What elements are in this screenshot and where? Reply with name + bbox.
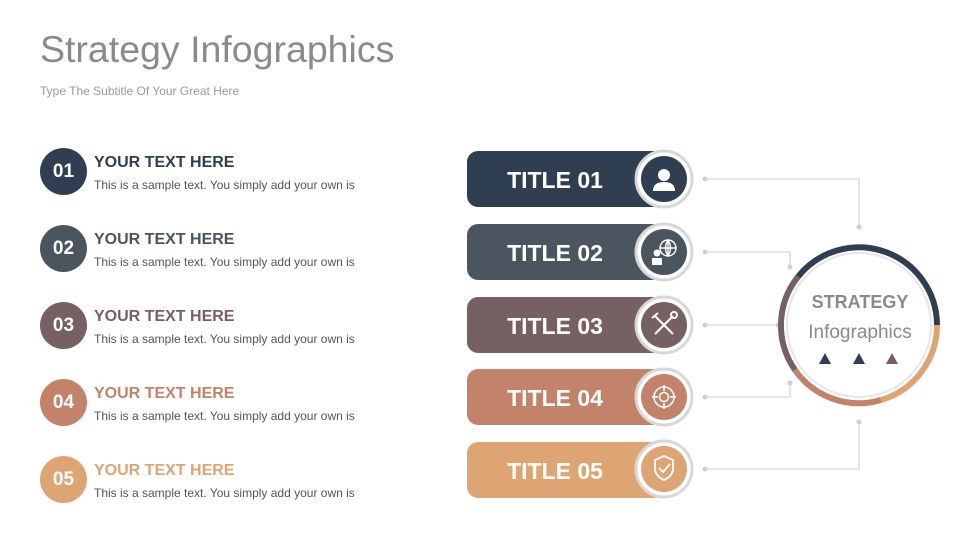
text block 05: YOUR TEXT HERE xyxy=(94,462,234,479)
bar: title 05 xyxy=(467,441,692,498)
text block 04: This is a sample text. You simply add your own is xyxy=(94,409,355,423)
text block 01 xyxy=(94,154,355,192)
number badge 04: 04 xyxy=(53,392,74,413)
central circle: STRATEGY xyxy=(812,292,908,312)
subtitle: Type The Subtitle Of Your Great Here xyxy=(40,84,239,98)
number badge 05 xyxy=(40,456,87,503)
text block 01: YOUR TEXT HERE xyxy=(94,154,234,171)
number badge 01 xyxy=(40,148,87,195)
text block 04: YOUR TEXT HERE xyxy=(94,385,234,402)
number badge 03: 03 xyxy=(53,315,74,336)
text block 03: YOUR TEXT HERE xyxy=(94,308,234,325)
number badge 02: 02 xyxy=(53,238,74,259)
number badge 03 xyxy=(40,302,87,349)
icon: tools xyxy=(652,312,677,334)
bar: title 04: TITLE 04 xyxy=(507,385,603,411)
icon: person xyxy=(653,169,675,191)
title: Strategy Infographics xyxy=(40,28,394,70)
number badge 02 xyxy=(40,225,87,272)
text block 05: This is a sample text. You simply add your own is xyxy=(94,486,355,500)
bar: title 02: TITLE 02 xyxy=(507,240,603,266)
text block 02 xyxy=(94,231,355,269)
text block 02: YOUR TEXT HERE xyxy=(94,231,234,248)
icon: globe person xyxy=(660,240,676,256)
text block 05 xyxy=(94,462,355,500)
number badge 04 xyxy=(40,379,87,426)
number badge 05: 05 xyxy=(53,469,74,490)
text block 04 xyxy=(94,385,355,423)
bar: title 01 xyxy=(467,151,692,207)
bar: title 03 xyxy=(467,297,692,353)
icon: shield xyxy=(655,456,673,480)
central circle: Infographics xyxy=(808,322,912,343)
text block 03: This is a sample text. You simply add your own is xyxy=(94,332,355,346)
icon: target xyxy=(652,385,676,409)
text block 01: This is a sample text. You simply add your own is xyxy=(94,178,355,192)
bar: title 04 xyxy=(467,369,692,425)
bar: title 02 xyxy=(467,224,692,280)
bar: title 01: TITLE 01 xyxy=(507,167,603,193)
text block 02: This is a sample text. You simply add your own is xyxy=(94,255,355,269)
text block 03 xyxy=(94,308,355,346)
central circle xyxy=(781,247,937,403)
bar: title 05: TITLE 05 xyxy=(507,458,603,484)
bar: title 03: TITLE 03 xyxy=(507,313,603,339)
number badge 01: 01 xyxy=(53,161,74,182)
